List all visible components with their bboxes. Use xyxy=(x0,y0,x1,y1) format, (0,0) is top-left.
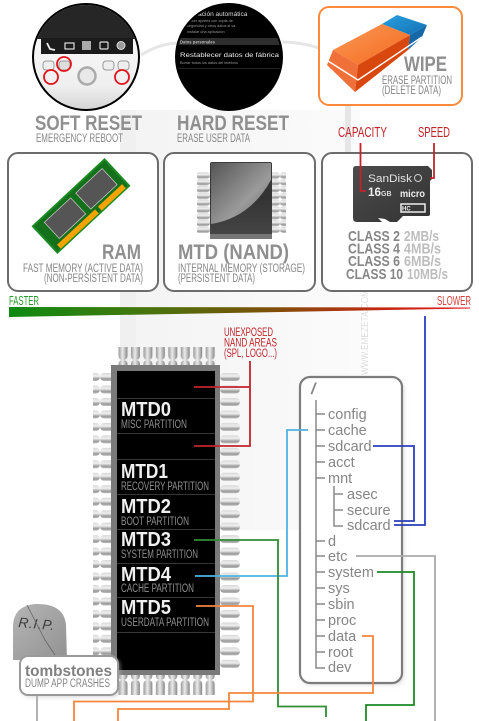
connector: sdcard link xyxy=(373,446,414,521)
partition: MTD5: USERDATA PARTITION xyxy=(121,617,209,629)
tombstones: DUMP APP CRASHES xyxy=(25,678,110,690)
panel: filesystem tree: proc xyxy=(328,613,356,629)
panel: filesystem tree: dev xyxy=(328,660,352,676)
panel: SD card: 4MB/s xyxy=(404,240,441,258)
panel: filesystem tree: acct xyxy=(328,455,355,471)
partition: MTD4 xyxy=(121,564,194,595)
speed scale xyxy=(9,294,471,317)
icon: microSD card xyxy=(353,166,432,222)
panel: filesystem tree: secure xyxy=(347,503,391,519)
heading: hard reset xyxy=(177,112,289,145)
icon: eraser xyxy=(327,15,427,92)
connector: sdcard up xyxy=(394,316,425,525)
panel: RAM xyxy=(8,153,158,291)
heading: soft reset: SOFT RESET xyxy=(35,112,142,135)
connector: system out xyxy=(194,540,326,717)
panel: filesystem tree: sdcard xyxy=(347,518,391,534)
partition: MTD1 xyxy=(121,461,209,493)
partition: MTD3: MTD3 xyxy=(121,529,171,551)
partition: MTD2: MTD2 xyxy=(121,496,171,518)
panel: filesystem tree: / xyxy=(310,381,317,398)
heading: soft reset xyxy=(35,112,142,145)
icon: hard reset screen xyxy=(175,3,286,111)
label: capacity: CAPACITY xyxy=(338,125,387,141)
label: speed: SPEED xyxy=(418,125,450,141)
panel: SD card: CLASS 2 xyxy=(348,228,400,245)
heading: soft reset: EMERGENCY REBOOT xyxy=(36,131,123,145)
partition: MTD3: SYSTEM PARTITION xyxy=(121,549,198,561)
connector: speed xyxy=(430,143,434,178)
icon: microSD card: GB xyxy=(381,191,392,198)
partition: MTD4: CACHE PARTITION xyxy=(121,583,194,595)
connector: data in xyxy=(118,636,373,721)
panel: MTD NAND: INTERNAL MEMORY (STORAGE) xyxy=(178,263,305,275)
panel: filesystem tree: sbin xyxy=(328,597,355,613)
panel: SD card: 6MB/s xyxy=(404,253,441,270)
connector: tombstones xyxy=(36,695,38,721)
icon: microSD card: SanDisk xyxy=(368,173,413,185)
icon: hard reset screen: ración automática xyxy=(196,11,248,18)
speed scale: FASTER xyxy=(9,294,39,308)
partition: MTD0: MTD0 xyxy=(121,399,171,421)
panel: SD card: CLASS 4 xyxy=(348,240,401,258)
panel: filesystem tree: system xyxy=(328,565,374,581)
icon: NAND chip xyxy=(197,162,286,239)
panel: MTD NAND: MTD (NAND) xyxy=(178,241,289,264)
icon: hard reset screen: Hacer ajustes con copia de xyxy=(187,19,233,23)
callout: unexposed NAND areas: UNEXPOSED xyxy=(224,327,273,339)
panel: filesystem tree xyxy=(300,377,404,685)
tombstones xyxy=(13,604,120,697)
panel: filesystem tree: cache xyxy=(328,423,367,439)
panel: SD card: CLASS 6 xyxy=(348,253,400,270)
partition: MTD5 xyxy=(121,597,209,629)
panel: wipe xyxy=(319,7,462,105)
heading: hard reset: ERASE USER DATA xyxy=(177,131,250,145)
MTD chip xyxy=(93,347,240,695)
panel: filesystem tree: sys xyxy=(328,581,350,597)
panel: SD card: CLASS 10 xyxy=(346,266,403,283)
icon: hard reset screen: Datos personales xyxy=(180,40,216,44)
icon: hard reset screen: Restablecer datos de fábrica xyxy=(180,52,280,59)
connector: capacity xyxy=(360,143,366,191)
icon: hard reset screen: instalar una aplicación xyxy=(187,30,225,34)
connector: system in xyxy=(366,572,414,721)
partition: MTD0 xyxy=(121,399,187,431)
panel: SD card: 2MB/s xyxy=(404,228,439,245)
callout: unexposed NAND areas: (SPL, LOGO...) xyxy=(224,348,277,360)
panel: filesystem tree: asec xyxy=(347,487,378,503)
panel: wipe: WIPE xyxy=(404,53,447,76)
heading: hard reset: HARD RESET xyxy=(177,112,289,135)
partition: MTD3 xyxy=(121,529,198,561)
icon: RAM module xyxy=(31,158,131,254)
partition: MTD2 xyxy=(121,496,189,528)
panel: wipe: (DELETE DATA) xyxy=(382,83,441,97)
panel: RAM: RAM xyxy=(102,241,141,264)
partition: MTD4: MTD4 xyxy=(121,564,172,586)
connector: etc xyxy=(356,556,435,721)
panel: filesystem tree: d xyxy=(328,534,336,550)
icon: microSD card: micro xyxy=(400,189,425,200)
panel: SD card xyxy=(322,143,472,291)
partition: MTD1: RECOVERY PARTITION xyxy=(121,481,209,493)
panel: filesystem tree: data xyxy=(328,629,357,645)
icon: microSD card: HC xyxy=(402,206,411,212)
callout: unexposed NAND areas: NAND AREAS xyxy=(224,338,277,350)
tombstones: tombstones xyxy=(25,663,112,680)
connector: cache xyxy=(195,430,308,576)
icon: tombstone: R.I.P. xyxy=(18,614,55,633)
partition: MTD2: BOOT PARTITION xyxy=(121,516,189,528)
panel: filesystem tree: etc xyxy=(328,549,347,565)
panel: MTD NAND xyxy=(164,153,315,291)
partition: MTD1: MTD1 xyxy=(121,461,168,483)
panel: filesystem tree: sdcard xyxy=(328,439,372,455)
text: WWW.EMEZETA.COM xyxy=(360,290,371,375)
connector: userdata out xyxy=(74,606,253,721)
icon: hard reset screen: seguridad y otros datos si va xyxy=(187,24,236,28)
callout: unexposed NAND areas xyxy=(194,327,277,446)
panel: RAM: FAST MEMORY (ACTIVE DATA) xyxy=(23,263,143,275)
panel: filesystem tree: config xyxy=(328,407,367,423)
partition: MTD0: MISC PARTITION xyxy=(121,419,187,431)
panel: filesystem tree: root xyxy=(328,645,353,661)
partition: MTD5: MTD5 xyxy=(121,597,171,619)
panel: RAM: (NON-PERSISTENT DATA) xyxy=(44,273,143,285)
panel: MTD NAND: (PERSISTENT DATA) xyxy=(178,273,255,285)
panel: SD card: 10MB/s xyxy=(407,266,448,283)
icon: hard reset screen: Borrar todos los datos del teléfono xyxy=(180,61,238,65)
icon: microSD card: 16 xyxy=(368,185,381,199)
icon: soft reset phone xyxy=(32,3,140,111)
panel: filesystem tree: mnt xyxy=(328,471,352,487)
